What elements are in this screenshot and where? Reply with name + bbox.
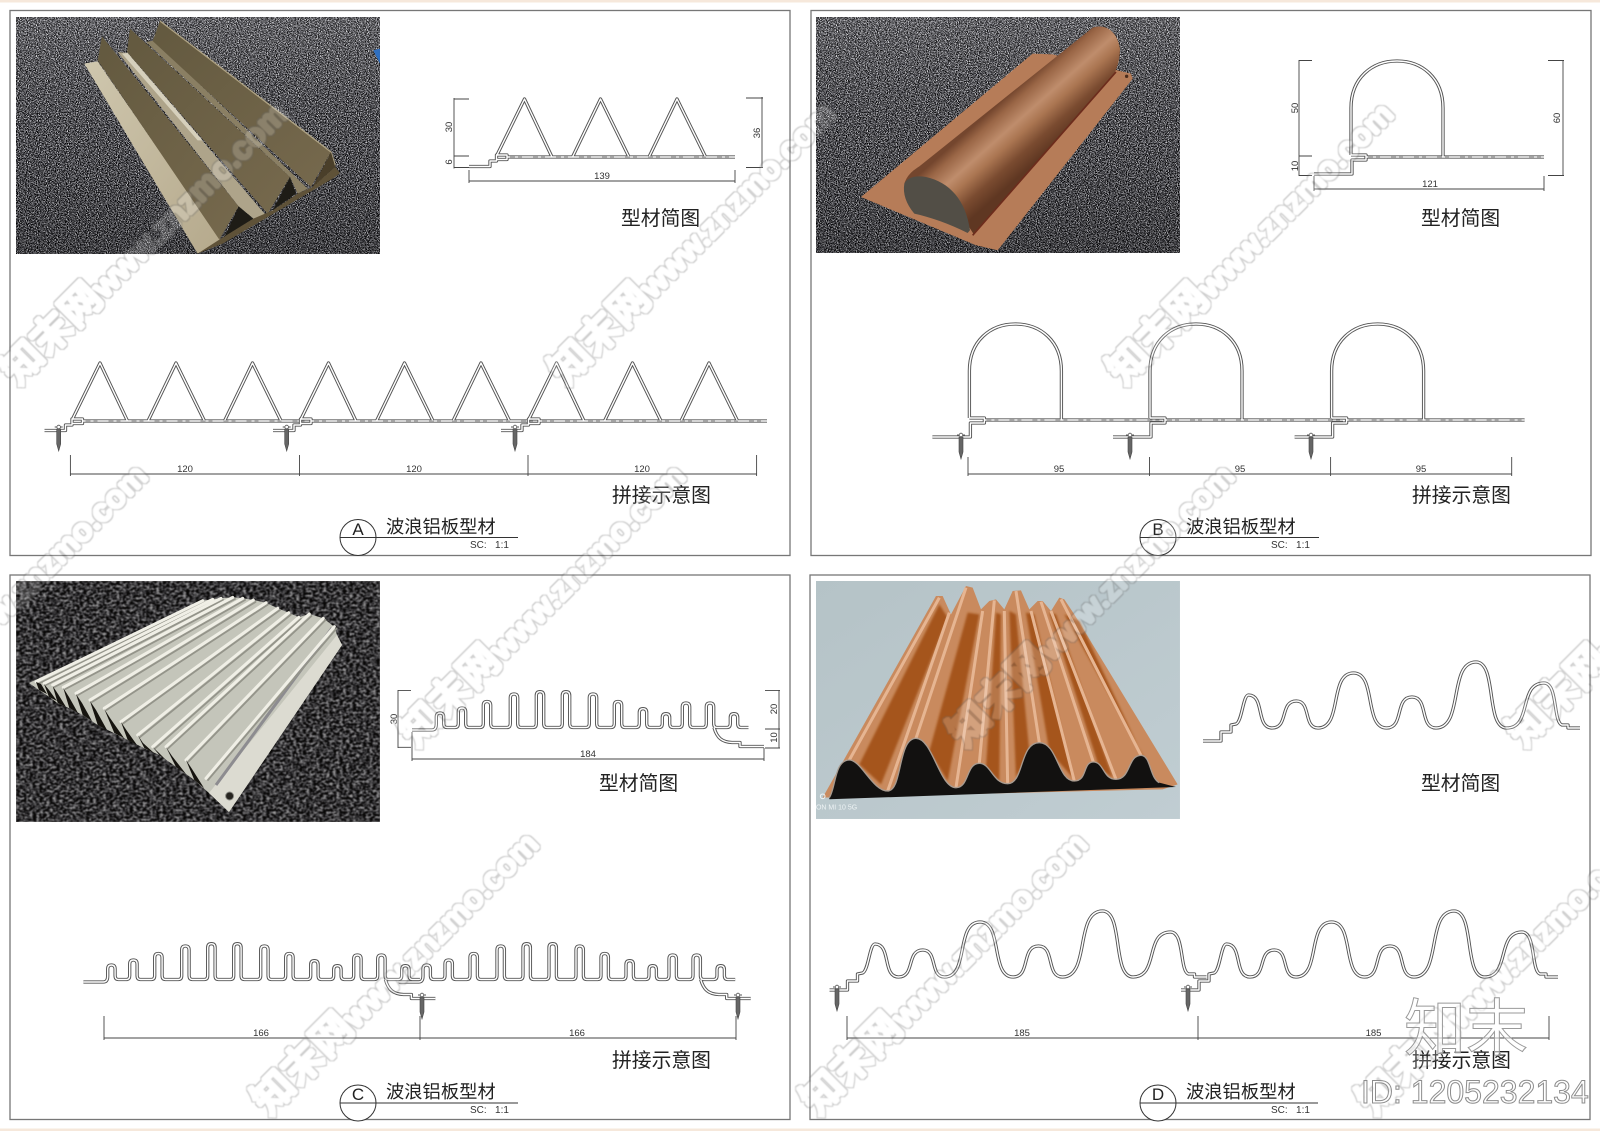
panel: profile D wave [810, 575, 1590, 1121]
dimensions B: 50 [1290, 103, 1301, 113]
dimensions joint B: 95 [1416, 464, 1426, 475]
label: profile sketch: 型材简图 [599, 773, 678, 795]
dimensions C: 10 [769, 732, 780, 743]
title block A: 波浪铝板型材 [386, 516, 496, 537]
dimensions C: 30 [389, 714, 400, 724]
brand watermark: 知末 [1404, 995, 1528, 1064]
dimensions A: 6 [444, 159, 455, 165]
dimensions joint D: 185 [1366, 1028, 1381, 1039]
label: profile sketch: 型材简图 [1421, 773, 1500, 795]
profile sketch B [1290, 60, 1564, 191]
photo: white ribbed panel on carpet [16, 581, 380, 822]
title block B: B [1152, 520, 1164, 539]
diagonal site watermarks: 知末网www.znzmo.com [540, 90, 844, 393]
dimensions B: 121 [1422, 179, 1438, 190]
title block D [1140, 1081, 1318, 1121]
title block D: D [1152, 1085, 1164, 1104]
title block C [340, 1081, 518, 1121]
title block A: A [352, 520, 364, 539]
dimensions A: 30 [444, 122, 455, 132]
joint drawing C [83, 944, 751, 1040]
joint drawing D [830, 911, 1558, 1040]
label: profile sketch: 型材简图 [1421, 208, 1500, 230]
diagonal site watermarks: 知末网www.znzmo.com [1098, 90, 1402, 393]
label: joint diagram: 拼接示意图 [612, 485, 711, 507]
diagonal site watermarks: 知末网www.znzmo.com [792, 820, 1096, 1123]
dimensions A [444, 97, 763, 183]
joint drawing A [44, 363, 767, 476]
panel: profile A triangular [10, 10, 790, 556]
dimensions joint B [968, 457, 1512, 476]
title block D: SC: 1:1 [1271, 1105, 1310, 1116]
dimensions joint A: 120 [406, 464, 422, 475]
profile sketch D [1203, 662, 1580, 741]
diagonal site watermarks: 知末网www.znzmo.com [390, 452, 694, 755]
title block A [340, 516, 518, 556]
dimensions joint C: 166 [569, 1028, 585, 1039]
diagonal site watermarks: 知末网www.znzmo.com [939, 452, 1243, 755]
joint drawing B [932, 324, 1525, 476]
dimensions B [1290, 60, 1564, 191]
photo: copper half-round panel on carpet [816, 17, 1180, 253]
title block C: 波浪铝板型材 [386, 1081, 496, 1102]
dimensions joint B: 95 [1054, 464, 1064, 475]
diagonal site watermarks: 知末网www.znzmo.com [243, 820, 547, 1123]
label: joint diagram: 拼接示意图 [1412, 485, 1511, 507]
photo: copper wave panel [816, 581, 1180, 819]
title block B: 波浪铝板型材 [1186, 516, 1296, 537]
title block A: SC: 1:1 [470, 540, 509, 551]
title block C: SC: 1:1 [470, 1105, 509, 1116]
panel: profile B arch [811, 10, 1591, 556]
dimensions C: 184 [580, 749, 596, 760]
profile sketch C [389, 690, 780, 761]
brand watermark: ID: 1205232134 [1361, 1074, 1589, 1110]
dimensions joint A: 120 [177, 464, 193, 475]
label: profile sketch: 型材简图 [621, 208, 700, 230]
dimensions joint C [104, 1016, 736, 1040]
photo: triangular aluminium panel on carpet [16, 17, 380, 254]
dimensions C: 20 [769, 704, 780, 714]
dimensions joint C: 166 [253, 1028, 269, 1039]
dimensions C [389, 690, 780, 761]
dimensions B: 60 [1552, 113, 1563, 123]
label: joint diagram: 拼接示意图 [1412, 1050, 1511, 1072]
title block B: SC: 1:1 [1271, 540, 1310, 551]
dimensions B: 10 [1290, 161, 1301, 171]
dimensions joint D: 185 [1014, 1028, 1030, 1039]
title block B [1140, 516, 1319, 556]
dimensions joint A [70, 455, 757, 476]
title block D: 波浪铝板型材 [1186, 1081, 1296, 1102]
brand watermark [1361, 995, 1589, 1110]
profile sketch A [444, 97, 763, 183]
dimensions joint D [847, 1016, 1549, 1040]
diagonal site watermarks: 知末网www.znzmo.com [0, 90, 296, 393]
photo: copper wave panel: ON MI 10 5G [816, 805, 857, 812]
title block C: C [352, 1085, 364, 1104]
label: joint diagram: 拼接示意图 [612, 1050, 711, 1072]
dimensions A: 139 [594, 171, 610, 182]
dimensions A: 36 [752, 128, 763, 138]
dimensions joint A: 120 [634, 464, 650, 475]
panel: profile C ribbed [10, 575, 790, 1121]
dimensions joint B: 95 [1235, 464, 1245, 475]
